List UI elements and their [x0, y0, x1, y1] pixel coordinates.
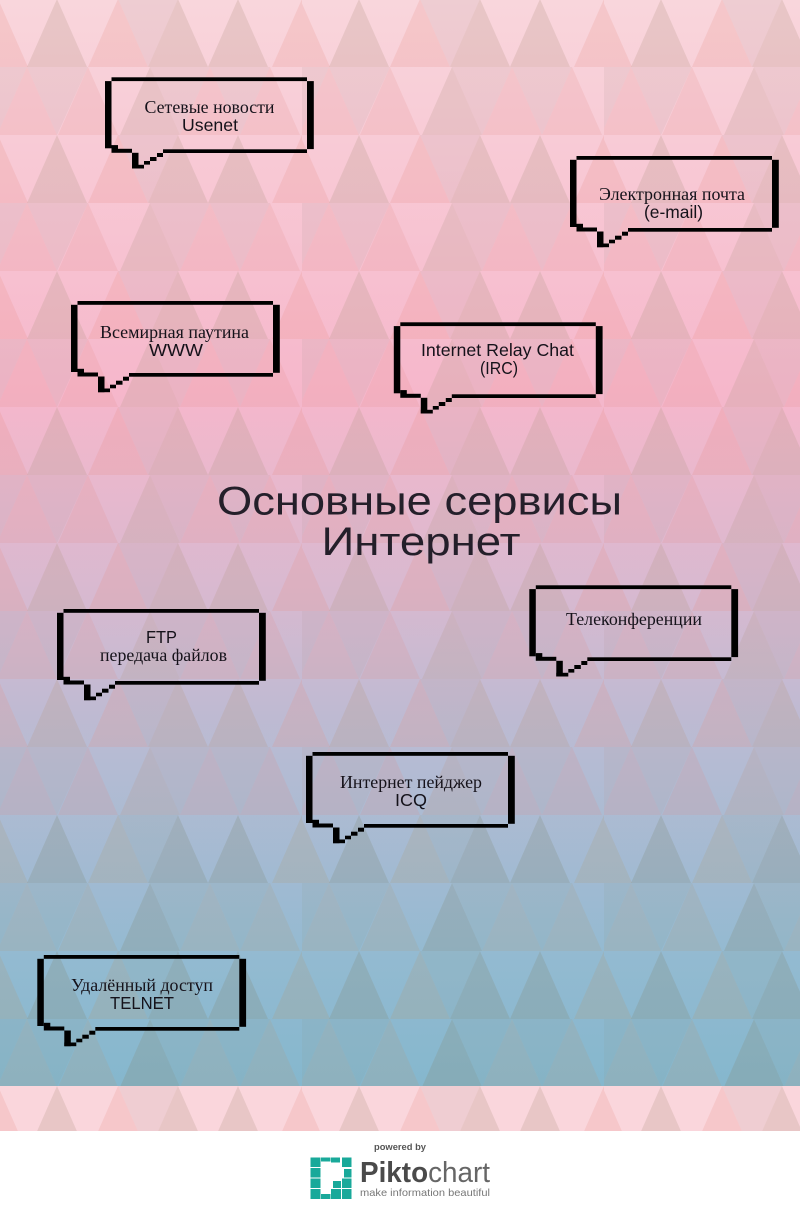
speech bubble: WWW: Всемирная паутина [100, 322, 249, 342]
speech bubble: e-mail [570, 156, 779, 247]
speech bubble: Usenet: Usenet [182, 115, 238, 135]
title: Интернет [322, 520, 520, 564]
speech bubble: e-mail: Электронная почта [599, 184, 745, 204]
speech bubble: e-mail: (e-mail) [644, 202, 703, 222]
background: pink bottom strip [0, 1086, 800, 1131]
speech bubble: IRC: Internet Relay Chat [421, 340, 574, 360]
tagline: make information beautiful [360, 1187, 490, 1199]
icon: Piktochart P mark [310, 1158, 352, 1199]
speech bubble: ICQ [306, 752, 515, 843]
speech bubble: WWW [71, 301, 280, 392]
title: Основные сервисы [217, 480, 622, 524]
speech bubble: teleconferences: Телеконференции [566, 609, 702, 629]
speech bubble: TELNET [37, 955, 246, 1046]
wordmark: Piktochart [360, 1157, 490, 1189]
speech bubble: IRC: (IRC) [480, 358, 518, 378]
Piktochart logo and credit [310, 1142, 490, 1199]
speech bubble: Usenet: Сетевые новости [144, 97, 274, 117]
powered by label: powered by [374, 1142, 427, 1153]
speech bubble: Usenet [105, 77, 314, 168]
title [217, 480, 622, 564]
speech bubble: TELNET: Удалённый доступ [71, 975, 213, 995]
speech bubble: teleconferences [529, 585, 738, 676]
speech bubble: ICQ: ICQ [395, 790, 427, 810]
speech bubble: TELNET: TELNET [110, 993, 174, 1013]
speech bubble: FTP: FTP [146, 627, 177, 647]
footer panel [0, 1131, 800, 1211]
speech bubble: FTP: передача файлов [100, 645, 227, 665]
speech bubble: ICQ: Интернет пейджер [340, 772, 482, 792]
speech bubble: FTP [57, 609, 266, 700]
speech bubble: WWW: WWW [149, 340, 204, 360]
speech bubble: IRC [394, 322, 603, 414]
